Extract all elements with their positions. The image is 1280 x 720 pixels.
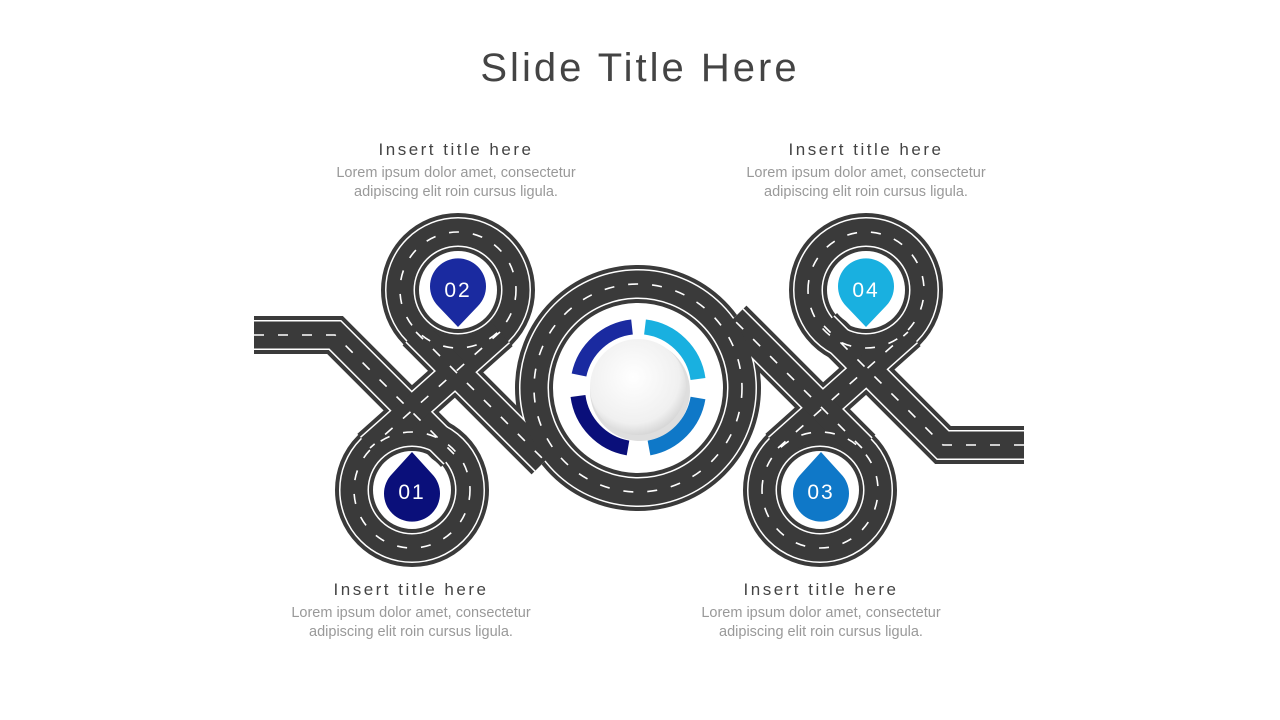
pin 04: 04 bbox=[852, 279, 880, 302]
text block: 04: adipiscing elit roin cursus ligula. bbox=[764, 184, 968, 200]
pin 01 bbox=[375, 452, 449, 527]
text block: 01: Insert title here bbox=[334, 580, 488, 599]
text block: 04 bbox=[746, 140, 986, 200]
pin 02 bbox=[421, 253, 495, 327]
text block: 04: Insert title here bbox=[789, 140, 943, 159]
text block: 02: Lorem ipsum dolor amet, consectetur bbox=[336, 165, 576, 181]
pin 02: 02 bbox=[444, 279, 472, 302]
text block: 03: Lorem ipsum dolor amet, consectetur bbox=[701, 605, 941, 621]
pin 03 bbox=[784, 452, 858, 527]
pin 03: 03 bbox=[807, 481, 835, 504]
text block: 02: Insert title here bbox=[379, 140, 533, 159]
pin 01: 01 bbox=[398, 481, 426, 504]
text block: 01 bbox=[291, 580, 531, 640]
text block: 01: adipiscing elit roin cursus ligula. bbox=[309, 624, 513, 640]
text block: 03 bbox=[701, 580, 941, 640]
title: Slide Title Here bbox=[480, 46, 800, 90]
text block: 02 bbox=[336, 140, 576, 200]
text block: 03: Insert title here bbox=[744, 580, 898, 599]
text block: 04: Lorem ipsum dolor amet, consectetur bbox=[746, 165, 986, 181]
text block: 02: adipiscing elit roin cursus ligula. bbox=[354, 184, 558, 200]
center hub bbox=[554, 304, 722, 472]
road bbox=[254, 232, 1024, 548]
pin 04 bbox=[829, 253, 903, 327]
text block: 03: adipiscing elit roin cursus ligula. bbox=[719, 624, 923, 640]
text block: 01: Lorem ipsum dolor amet, consectetur bbox=[291, 605, 531, 621]
